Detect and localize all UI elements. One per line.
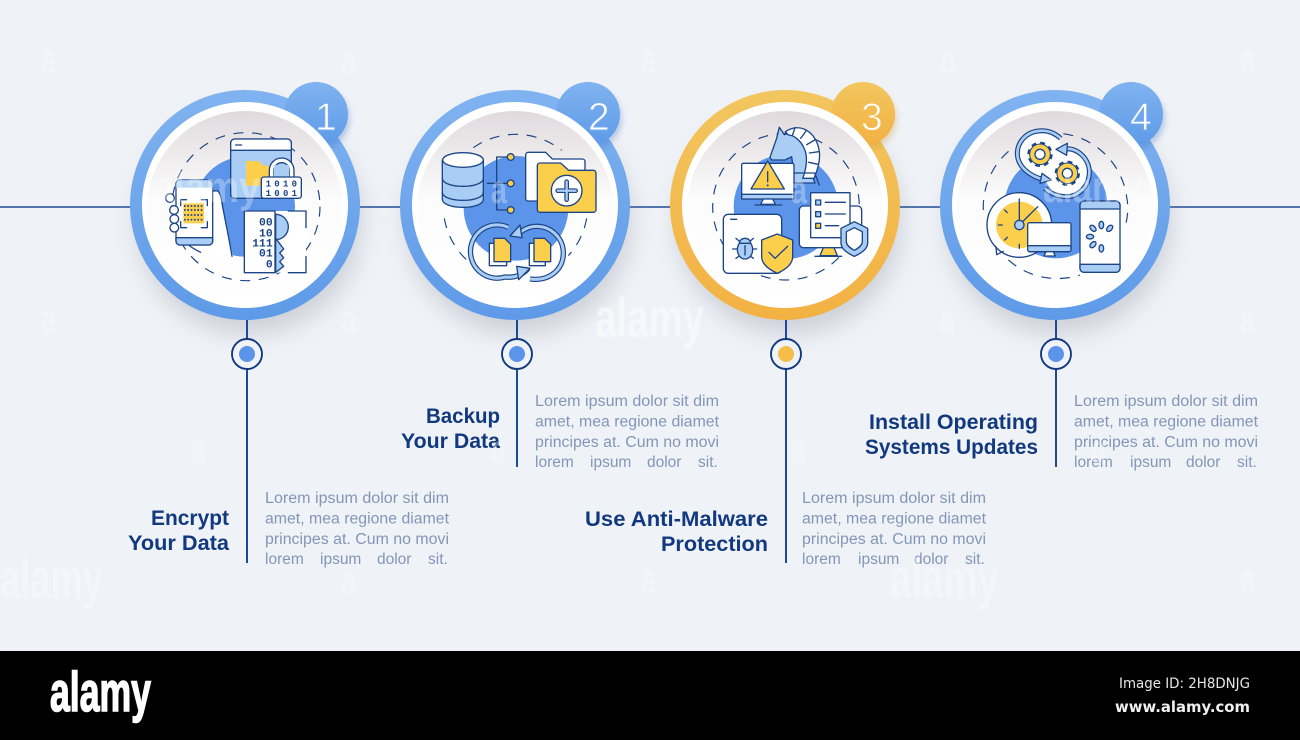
text block: step 1: dolor [377,551,411,568]
step number 1: 1 [315,96,337,139]
text block: step 2: amet, mea regione diamet [535,414,720,430]
watermarks: a [791,168,808,212]
text block: step 2: Lorem ipsum dolor sit dim [535,393,719,410]
heading: backup your data [401,405,500,453]
text block: step 3: principes at. Cum no movi [802,531,986,548]
connector: step 4 stem [1041,320,1071,467]
watermarks [0,38,1256,610]
icon: encryption [166,133,320,281]
icon: encryption: 10 [259,229,273,241]
text block: step 4: lorem [1074,454,1113,471]
website: www.alamy.com [1115,698,1250,716]
text block: step 3: sit. [965,551,985,568]
text block: step 2: lorem [535,454,574,471]
watermarks: a [341,558,357,602]
heading: use anti-malware protection: Use Anti-Malware [585,508,768,531]
watermarks: a [1240,38,1256,82]
icon: encryption: 1001 [266,189,298,199]
heading: encrypt your data: Encrypt [151,507,229,530]
horizontal timeline [0,206,1300,208]
watermarks: a [41,298,57,342]
text block: step 4: Lorem ipsum dolor sit dim [1074,393,1258,410]
text block: step 3: ipsum [858,551,899,568]
step number 3: 3 [861,96,883,139]
step number 4: 4 [1130,96,1152,139]
text block: step 2 [535,393,720,471]
icon: encryption: 1010 [266,179,297,189]
text block: step 3: amet, mea regione diamet [802,510,987,528]
icon: encryption: 01 [259,249,273,261]
watermarks: a [1240,298,1256,342]
footer bar [0,651,1300,740]
icon: malware protection [713,127,868,280]
text block: step 1: sit. [428,551,448,568]
text block: step 4: principes at. Cum no movi [1074,434,1258,451]
heading: use anti-malware protection: Protection [661,533,768,556]
text block: step 1: principes at. Cum no movi [265,531,449,548]
icon: encryption: 111 [252,239,273,251]
watermarks: a [940,298,956,342]
text block: step 1: amet, mea regione diamet [265,510,450,528]
watermarks: a [1240,558,1256,602]
text block: step 2: ipsum [590,454,631,471]
text block: step 3: lorem [802,551,841,568]
connector: step 1 stem [232,320,262,563]
heading: encrypt your data [128,507,229,555]
text block: step 4: dolor [1186,454,1220,471]
panel: step 1 encrypt your data [130,82,361,334]
icon: updates [983,131,1128,279]
connector: step 2 stem [502,320,532,467]
text block: step 4: sit. [1237,454,1257,471]
watermarks: alamy [153,163,260,212]
watermarks: a [341,38,357,82]
heading: install operating systems updates [865,411,1038,459]
step number 2: 2 [588,96,610,139]
watermarks: a [1091,428,1107,472]
image id: Image ID: 2H8DNJG [1119,676,1250,692]
heading: backup your data: Backup [426,405,500,428]
text block: step 3: dolor [914,551,948,568]
watermarks: alamy [890,547,999,610]
text block: step 4 [1074,393,1259,471]
watermarks: alamy [0,547,103,610]
text block: step 4: amet, mea regione diamet [1074,414,1259,430]
watermarks: a [641,38,657,82]
icon: encryption: 00 [259,218,273,230]
text block: step 2: dolor [647,454,681,471]
icon: encryption: 0 [266,259,273,271]
watermarks: a [41,38,57,82]
text block: step 1 [265,490,450,568]
text block: step 1: Lorem ipsum dolor sit dim [265,490,449,507]
heading: backup your data: Your Data [401,430,500,453]
watermarks: alamy [595,286,704,349]
connector: step 3 stem [771,320,801,563]
heading: encrypt your data: Your Data [128,532,229,555]
text block: step 4: ipsum [1130,454,1171,471]
icon: backup [442,134,596,280]
watermarks: a [491,428,507,472]
watermarks: a [791,428,807,472]
text block: step 1: ipsum [320,551,361,568]
text block: step 2: principes at. Cum no movi [535,434,719,451]
watermarks: a [491,168,508,212]
footer logo: alamy [50,660,151,723]
watermarks: alamy [1043,163,1143,212]
watermarks: a [341,298,357,342]
panel: step 3 anti-malware [670,82,901,334]
heading: install operating systems updates: Systems Updates [865,436,1038,459]
text block: step 3 [802,490,987,568]
text block: step 2: sit. [698,454,718,471]
text block: step 1: lorem [265,551,304,568]
watermarks: a [191,428,207,472]
text block: step 3: Lorem ipsum dolor sit dim [802,490,986,507]
panel: step 2 backup your data [400,82,631,334]
watermarks: a [641,558,657,602]
panel: step 4 system updates [940,82,1171,334]
watermarks: a [940,38,956,82]
heading: use anti-malware protection [585,508,768,556]
heading: install operating systems updates: Install Operating [869,411,1038,434]
